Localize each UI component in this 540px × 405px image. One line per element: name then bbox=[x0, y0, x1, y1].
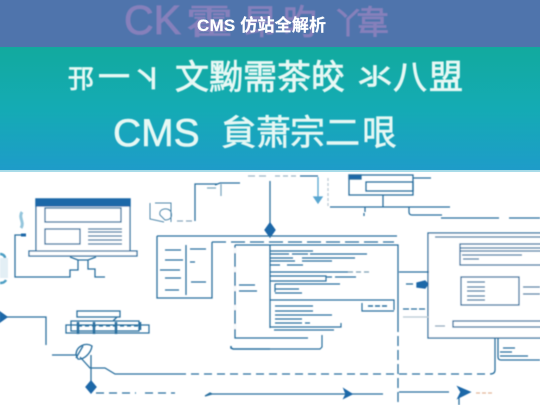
artwork heading line 2 bbox=[113, 112, 397, 155]
connector: top dashed bbox=[177, 176, 275, 237]
artwork heading line 1: 盟 bbox=[429, 59, 463, 97]
ghost artwork heading: 韋 bbox=[356, 4, 389, 41]
artwork heading line 1: 茶 bbox=[277, 59, 311, 97]
icon: cloud document bbox=[150, 203, 172, 222]
artwork heading line 2: 萧 bbox=[256, 114, 291, 153]
panel: top right component bbox=[275, 175, 540, 218]
artwork heading line 1: l bbox=[150, 63, 157, 96]
artwork heading line 2: CMS bbox=[113, 112, 200, 155]
header bar: translucent title strip bbox=[0, 0, 540, 47]
artwork heading line 1 bbox=[68, 59, 463, 97]
icon: laptop bbox=[15, 199, 137, 277]
icon: arrow to right window bbox=[399, 272, 429, 317]
ghost artwork heading bbox=[124, 0, 389, 43]
connector: lower left node bbox=[0, 312, 178, 393]
artwork heading line 1: 文 bbox=[175, 59, 209, 97]
artwork heading line 1: 需 bbox=[243, 59, 277, 97]
icon: server rack bbox=[66, 311, 149, 334]
icon: left connector ornaments bbox=[0, 212, 26, 283]
artwork heading line 2: 貟 bbox=[221, 114, 256, 153]
artwork heading line 1: 皎 bbox=[311, 59, 345, 97]
title: CMS 仿站全解析 bbox=[197, 15, 326, 35]
code lines block bbox=[270, 251, 394, 349]
artwork heading line 1: 丶 bbox=[130, 62, 160, 95]
artwork heading line 1: 八 bbox=[393, 59, 427, 97]
artwork heading line 1: 一 bbox=[98, 59, 130, 95]
artwork heading line 1: 氺 bbox=[358, 59, 392, 97]
banner: teal gradient with artwork heading bbox=[0, 47, 540, 172]
artwork heading line 2: 宗 bbox=[290, 114, 325, 153]
artwork heading line 1: 黝 bbox=[209, 59, 243, 97]
artwork heading line 1: 邘 bbox=[68, 64, 94, 94]
flow diagram bbox=[0, 175, 540, 405]
connector: bottom arrows bbox=[205, 346, 494, 405]
artwork heading line 2: 哏 bbox=[362, 114, 397, 153]
ghost artwork heading: 丫 bbox=[333, 8, 363, 41]
panel: middle document bbox=[157, 236, 398, 405]
panel: right window bbox=[178, 233, 540, 374]
ghost artwork heading: 霍 bbox=[186, 4, 233, 42]
artwork heading line 2: 二 bbox=[325, 114, 360, 153]
ghost artwork heading: 昂 bbox=[243, 4, 277, 42]
ghost artwork heading: 旳 bbox=[283, 4, 317, 42]
